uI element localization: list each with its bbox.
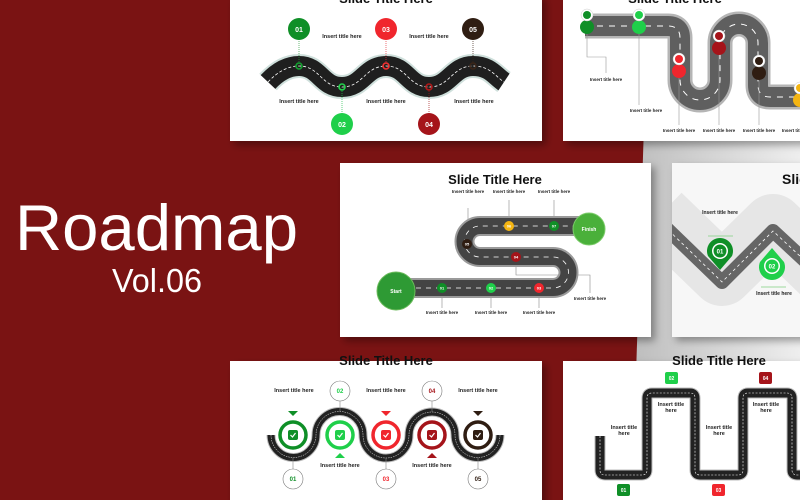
markers 01-07: 02 bbox=[489, 286, 494, 290]
slide 2: winding gray road: Insert title here bbox=[590, 77, 623, 82]
markers 01-05: 04 bbox=[425, 122, 433, 129]
slide 1: wave roadmap: Insert title here bbox=[322, 34, 362, 40]
slide 1: wave roadmap bbox=[230, 0, 542, 141]
slide 4: zigzag road partial: Insert title here bbox=[702, 210, 738, 216]
slide 3: S-curve road start to finish: Insert title here bbox=[523, 310, 556, 315]
finish circle: Finish bbox=[582, 227, 596, 233]
step circles with checks bbox=[280, 422, 491, 448]
finish circle bbox=[573, 213, 605, 245]
slide 2: winding gray road: Insert title here bbox=[630, 108, 663, 113]
markers 01-05: 02 bbox=[338, 122, 346, 129]
markers 01-07: 01 bbox=[440, 286, 445, 290]
slide 1: wave roadmap: Insert title here bbox=[279, 99, 319, 105]
square markers: 01 bbox=[621, 488, 626, 494]
slide 2: winding gray road: Insert title here bbox=[703, 128, 736, 133]
slide 5: circles with road: Insert title here bbox=[274, 388, 314, 394]
markers 01-07: 07 bbox=[552, 224, 557, 228]
number circles: 03 bbox=[383, 477, 390, 483]
subtitle: Vol.06: Vol.06 bbox=[112, 262, 202, 299]
slide 1: wave roadmap: Insert title here bbox=[454, 99, 494, 105]
map pins 01-06 bbox=[580, 9, 800, 107]
markers 01-07: 06 bbox=[507, 224, 512, 228]
markers 01-05: 05 bbox=[469, 27, 477, 34]
markers 01-07: 04 bbox=[514, 254, 519, 260]
slide 4: zigzag road partial bbox=[660, 163, 800, 337]
slide 6: square-wave road bbox=[563, 353, 800, 500]
slide 6: square-wave road: Insert title bbox=[706, 425, 732, 431]
slide 3: S-curve road start to finish: Insert title here bbox=[538, 189, 571, 194]
number circles: 02 bbox=[337, 389, 344, 395]
slide 6: square-wave road: here bbox=[665, 408, 677, 414]
markers 01-07 bbox=[437, 221, 559, 293]
square markers: 02 bbox=[669, 376, 674, 382]
slide 1: wave roadmap: Insert title here bbox=[366, 99, 406, 105]
pin 02: 02 bbox=[769, 264, 776, 270]
start circle: Start bbox=[390, 289, 402, 295]
slide 3: S-curve road start to finish bbox=[340, 163, 651, 337]
slide 5: circles with road: Slide Title Here bbox=[339, 353, 433, 368]
square markers: 03 bbox=[716, 488, 721, 494]
title: Roadmap: Roadmap bbox=[15, 191, 298, 264]
slide 6: square-wave road: Insert title bbox=[753, 402, 779, 408]
slide 6: square-wave road: Insert title bbox=[658, 402, 684, 408]
markers 01-05: 03 bbox=[382, 27, 390, 34]
number circles: 04 bbox=[429, 389, 436, 395]
slide 5: circles with road: Insert title here bbox=[458, 388, 498, 394]
start circle bbox=[377, 272, 415, 310]
pin 01: 01 bbox=[717, 250, 724, 256]
slide 5: circles with road: Insert title here bbox=[412, 463, 452, 469]
slide 5: circles with road bbox=[230, 353, 542, 500]
slide 5: circles with road: Insert title here bbox=[366, 388, 406, 394]
markers 01-07: 03 bbox=[537, 286, 542, 290]
slide 3: S-curve road start to finish: Insert title here bbox=[475, 310, 508, 315]
slide 6: square-wave road: here bbox=[713, 431, 725, 437]
slide 2: winding gray road bbox=[563, 0, 800, 141]
pin 02 bbox=[759, 248, 786, 287]
slide 5: circles with road: Insert title here bbox=[320, 463, 360, 469]
slide 3: S-curve road start to finish: Insert title here bbox=[574, 296, 607, 301]
slide 6: square-wave road: Insert title bbox=[611, 425, 637, 431]
number circles: 05 bbox=[475, 477, 482, 483]
slide 6: square-wave road: here bbox=[618, 431, 630, 437]
slide 2: winding gray road: Insert title here bbox=[663, 128, 696, 133]
slide 1: wave roadmap: Insert title here bbox=[409, 34, 449, 40]
number circles: 01 bbox=[290, 477, 297, 483]
pin 01 bbox=[707, 236, 733, 270]
slide 4: zigzag road partial: Insert title here bbox=[756, 291, 792, 297]
square markers bbox=[617, 372, 772, 496]
square markers: 04 bbox=[763, 376, 768, 382]
markers 01-05 bbox=[288, 18, 484, 135]
slide 3: S-curve road start to finish: Slide Title Here bbox=[448, 172, 542, 187]
number circles bbox=[283, 381, 488, 489]
markers 01-07: 05 bbox=[465, 242, 470, 246]
slide 2: winding gray road: Insert title here bbox=[743, 128, 776, 133]
markers 01-05: 01 bbox=[295, 27, 303, 34]
slide 3: S-curve road start to finish: Insert title here bbox=[493, 189, 526, 194]
slide 3: S-curve road start to finish: Insert title here bbox=[426, 310, 459, 315]
slide 6: square-wave road: here bbox=[760, 408, 772, 414]
slide 6: square-wave road: Slide Title Here bbox=[672, 353, 766, 368]
slide 3: S-curve road start to finish: Insert title here bbox=[452, 189, 485, 194]
